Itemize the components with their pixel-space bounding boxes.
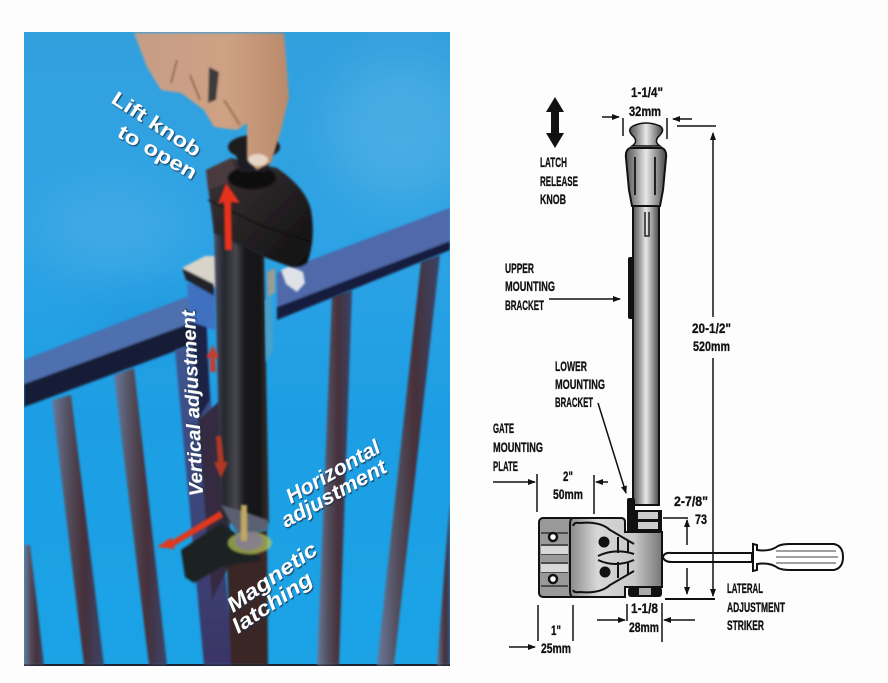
dimension: striker height — [663, 493, 708, 594]
label: lateral adjustment striker — [727, 580, 785, 633]
gate mounting plate — [539, 518, 575, 597]
dimension: overall height — [665, 126, 731, 599]
label: horizontal adjustment: adjustment — [277, 455, 392, 532]
label: latch release knob: RELEASE — [540, 173, 578, 189]
label: magnetic latching: latching — [228, 568, 317, 638]
label: lateral adjustment striker: STRIKER — [727, 617, 764, 633]
icon: latch release double arrow — [546, 97, 564, 148]
label: lower mounting bracket: MOUNTING — [555, 376, 605, 392]
gate post — [175, 312, 268, 665]
label: gate mounting plate: PLATE — [493, 458, 518, 474]
label: upper mounting bracket: BRACKET — [505, 297, 544, 313]
dimension: plate width 2 inch — [493, 468, 608, 514]
hand lifting knob — [134, 33, 289, 170]
screwdriver — [663, 544, 843, 571]
dimension: striker width: 28mm — [629, 619, 659, 635]
label: latch release knob — [540, 154, 578, 207]
dimension: knob width: 32mm — [629, 103, 661, 119]
latch shaft — [214, 230, 269, 523]
red vertical arrows — [206, 345, 228, 478]
label: lower mounting bracket: BRACKET — [555, 394, 593, 410]
fence top rail — [24, 208, 450, 407]
shaft decal — [265, 297, 273, 363]
label: latch release knob: LATCH — [540, 154, 567, 170]
dimension: plate width 2 inch: 2" — [563, 468, 573, 484]
label: gate mounting plate: GATE — [493, 420, 514, 436]
dimension: overall height: 20-1/2" — [692, 320, 731, 336]
red arrow horizontal — [157, 511, 223, 549]
latch shaft drawing — [628, 205, 659, 505]
label: gate mounting plate — [493, 420, 543, 474]
label: gate mounting plate: MOUNTING — [493, 439, 543, 455]
label: lower mounting bracket: LOWER — [555, 358, 587, 374]
dimension: knob width: 1-1/4" — [631, 84, 663, 100]
latch head — [206, 158, 313, 267]
dimension: plate 1 inch: 1" — [551, 622, 561, 638]
dimension: knob width — [602, 84, 692, 139]
dimension: plate width 2 inch: 50mm — [553, 486, 583, 502]
label: lateral adjustment striker: ADJUSTMENT — [727, 599, 785, 615]
label: upper mounting bracket — [505, 260, 555, 313]
strike bolt — [267, 268, 275, 298]
release knob — [228, 135, 280, 189]
label: magnetic latching — [228, 545, 318, 635]
latch body — [570, 518, 662, 597]
lower latch striker assembly — [181, 505, 272, 583]
label: lift knob to open — [111, 91, 200, 181]
label: lift knob to open: Lift knob — [107, 88, 205, 162]
strike plate tab — [281, 266, 305, 292]
dimension: plate 1 inch: 25mm — [541, 640, 571, 656]
dimension: striker height: 2-7/8" — [674, 493, 708, 509]
dimension: overall height: 520mm — [693, 338, 730, 354]
release knob drawing — [626, 123, 666, 206]
arrow: lower bracket — [598, 403, 626, 493]
label: magnetic latching: Magnetic — [223, 538, 322, 617]
label: lower mounting bracket — [555, 358, 605, 410]
label: lateral adjustment striker: LATERAL — [727, 580, 763, 596]
dimension: striker width — [597, 600, 695, 642]
lower bracket and collar — [627, 498, 662, 534]
panel: photo of latch on pool fence — [24, 32, 470, 666]
dimension: striker height: 73 — [695, 511, 707, 527]
dimension: striker width: 1-1/8 — [631, 600, 658, 616]
label: horizontal adjustment: Horizontal — [282, 435, 385, 508]
label: latch release knob: KNOB — [540, 191, 566, 207]
label: lift knob to open: to open — [114, 121, 201, 184]
red arrow up — [218, 183, 240, 250]
arrow: upper bracket — [549, 298, 620, 300]
dimension: plate 1 inch — [509, 605, 573, 656]
upper mounting bracket — [181, 254, 217, 330]
fence bars — [24, 255, 450, 665]
label: upper mounting bracket: UPPER — [505, 260, 534, 276]
panel: technical diagram — [493, 84, 843, 656]
label: vertical adjustment: Vertical adjustment — [178, 308, 208, 497]
label: upper mounting bracket: MOUNTING — [505, 278, 555, 294]
